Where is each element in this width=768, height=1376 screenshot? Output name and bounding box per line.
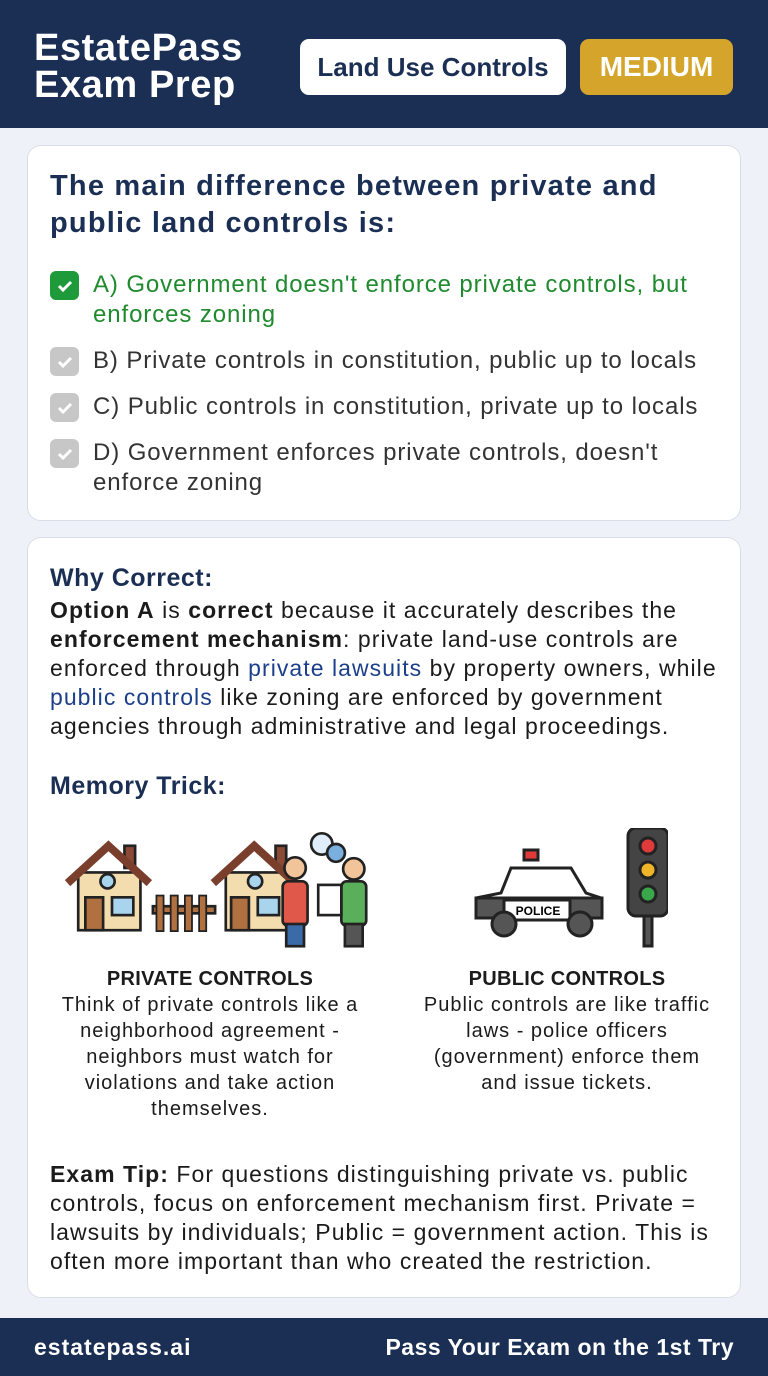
option A correct <box>50 271 688 328</box>
option A correct: A) Government doesn't enforce private controls, but <box>93 271 688 298</box>
icon: houses and neighbors <box>64 832 368 948</box>
private controls text block: neighbors must watch for <box>86 1046 334 1068</box>
private controls text block: Think of private controls like a <box>62 994 358 1016</box>
difficulty pill <box>580 39 733 95</box>
explanation text: enforcement mechanism: private land-use controls are <box>50 626 679 652</box>
panel: explanation <box>27 537 741 1298</box>
heading: why correct: Why Correct: <box>50 564 213 592</box>
option B: B) Private controls in constitution, public up to locals <box>93 347 697 374</box>
exam tip: Exam Tip: For questions distinguishing private vs. public <box>50 1161 689 1187</box>
footer site: estatepass.ai <box>34 1334 191 1360</box>
private controls text block: neighborhood agreement - <box>80 1020 340 1042</box>
public controls text block: and issue tickets. <box>481 1072 653 1094</box>
private controls text block: themselves. <box>151 1098 269 1120</box>
private controls text block <box>62 968 358 1120</box>
exam tip: controls, focus on enforcement mechanism first. Private = <box>50 1190 696 1216</box>
public controls text block: Public controls are like traffic <box>424 994 710 1016</box>
question heading: public land controls is: <box>50 207 396 239</box>
footer <box>0 1318 768 1376</box>
option C: C) Public controls in constitution, private up to locals <box>93 393 698 420</box>
icon: police car and traffic light: POLICE <box>516 904 560 918</box>
footer tagline: Pass Your Exam on the 1st Try <box>385 1334 734 1360</box>
option D <box>50 439 658 496</box>
option D: D) Government enforces private controls, doesn't <box>93 439 658 466</box>
exam tip: often more important than who created the restriction. <box>50 1248 653 1274</box>
topic pill: Land Use Controls <box>317 52 549 82</box>
header <box>0 0 768 128</box>
icon: police car and traffic light <box>474 828 668 948</box>
brand title: Exam Prep <box>34 64 236 106</box>
difficulty pill: MEDIUM <box>600 51 713 82</box>
option A correct: enforces zoning <box>93 301 276 328</box>
public controls text block: PUBLIC CONTROLS <box>469 968 665 990</box>
private controls text block: violations and take action <box>85 1072 335 1094</box>
explanation text: public controls like zoning are enforced by government <box>50 684 663 710</box>
explanation text: enforced through private lawsuits by property owners, while <box>50 655 717 681</box>
brand title <box>34 27 243 106</box>
explanation text <box>50 597 717 739</box>
public controls text block <box>424 968 710 1094</box>
brand title: EstatePass <box>34 27 243 69</box>
exam tip <box>50 1161 709 1274</box>
explanation text: agencies through administrative and legal proceedings. <box>50 713 669 739</box>
private controls text block: PRIVATE CONTROLS <box>107 968 313 990</box>
exam tip: lawsuits by individuals; Public = government action. This is <box>50 1219 709 1245</box>
option D: enforce zoning <box>93 469 263 496</box>
panel: question <box>27 145 741 521</box>
public controls text block: laws - police officers <box>466 1020 668 1042</box>
public controls text block: (government) enforce them <box>434 1046 700 1068</box>
question heading <box>50 170 658 239</box>
topic pill <box>300 39 566 95</box>
question heading: The main difference between private and <box>50 170 658 202</box>
explanation text: Option A is correct because it accurately describes the <box>50 597 677 623</box>
heading: memory trick: Memory Trick: <box>50 772 226 800</box>
